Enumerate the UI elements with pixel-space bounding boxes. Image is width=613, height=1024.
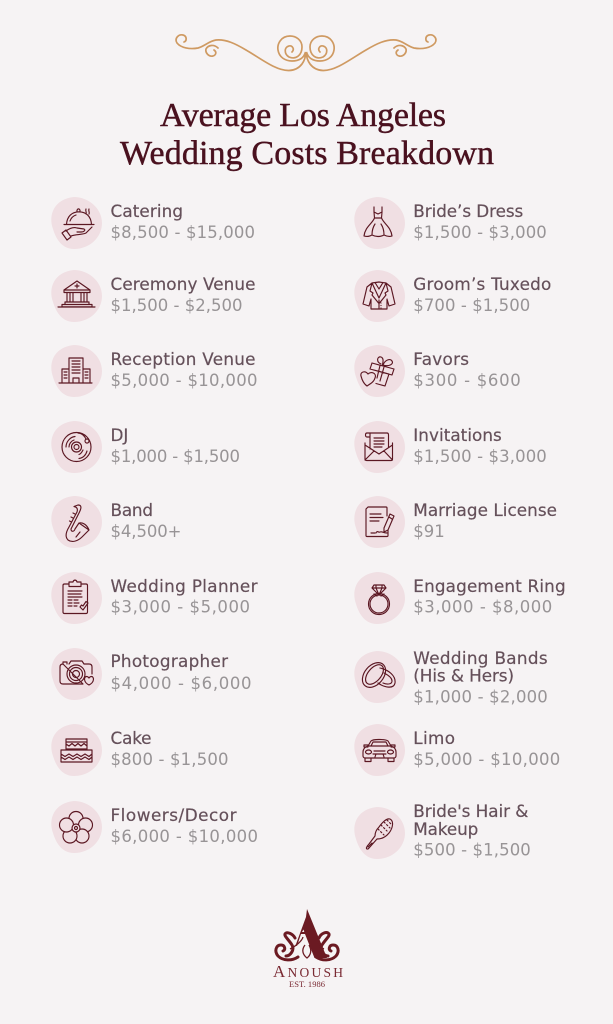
item: bride's hair and makeup: Makeup xyxy=(413,819,478,839)
item: band xyxy=(51,496,181,548)
item: wedding planner: $3,000 - $5,000 xyxy=(110,598,250,616)
item: groom's tuxedo xyxy=(354,270,551,322)
item: photographer: Photographer xyxy=(110,651,228,671)
item: bride's dress: $1,500 - $3,000 xyxy=(413,223,547,242)
item: favors xyxy=(354,345,521,397)
item: DJ: DJ xyxy=(110,425,128,445)
item: catering: $8,500 - $15,000 xyxy=(110,223,255,242)
item: flowers and decor xyxy=(51,801,258,853)
title: Wedding Costs Breakdown xyxy=(120,135,494,172)
logo: Anoush xyxy=(273,909,343,989)
item: wedding bands: (His & Hers) xyxy=(413,666,514,686)
item: limo xyxy=(354,724,560,776)
item: bride's hair and makeup: Bride's Hair & xyxy=(413,801,528,821)
item: favors: $300 - $600 xyxy=(413,371,521,390)
item: cake xyxy=(51,724,228,776)
item: DJ: $1,000 - $1,500 xyxy=(110,447,240,466)
title xyxy=(120,97,494,172)
item: flowers and decor: $6,000 - $10,000 xyxy=(110,827,258,846)
item: groom's tuxedo: $700 - $1,500 xyxy=(413,296,530,315)
title: Average Los Angeles xyxy=(160,97,446,134)
item: photographer: $4,000 - $6,000 xyxy=(110,674,252,693)
item: bride's dress: Bride’s Dress xyxy=(413,201,523,221)
item: limo: Limo xyxy=(413,728,455,748)
item: invitations: Invitations xyxy=(413,425,502,445)
item: catering: Catering xyxy=(110,201,183,221)
item: ceremony venue: Ceremony Venue xyxy=(110,274,256,294)
item: marriage license xyxy=(354,496,557,548)
item: limo: $5,000 - $10,000 xyxy=(413,750,560,769)
item: catering xyxy=(51,197,255,249)
item: band: Band xyxy=(110,500,153,520)
item: reception venue: Reception Venue xyxy=(110,349,256,369)
item: engagement ring xyxy=(354,572,566,624)
item: bride's hair and makeup: $500 - $1,500 xyxy=(413,840,531,860)
wordmark: ANOUSH xyxy=(273,962,343,981)
item: wedding planner: Wedding Planner xyxy=(110,576,258,596)
item: reception venue: $5,000 - $10,000 xyxy=(110,371,258,390)
item: invitations: $1,500 - $3,000 xyxy=(413,447,547,466)
item: band: $4,500+ xyxy=(110,522,182,541)
item: photographer xyxy=(51,648,251,700)
panel: right column of costs xyxy=(354,197,566,860)
item: cake: $800 - $1,500 xyxy=(110,750,228,769)
item: favors: Favors xyxy=(413,349,469,369)
panel: left column of costs xyxy=(51,197,258,853)
icon: monogram A with swirls xyxy=(276,909,338,960)
item: cake: Cake xyxy=(110,728,152,748)
item: wedding bands xyxy=(354,648,548,706)
item: flowers and decor: Flowers/Decor xyxy=(110,805,237,825)
item: ceremony venue: $1,500 - $2,500 xyxy=(110,296,242,315)
item: wedding bands: $1,000 - $2,000 xyxy=(413,688,548,706)
item: marriage license: $91 xyxy=(413,522,445,541)
established year: EST. 1986 xyxy=(289,979,325,989)
item: wedding planner xyxy=(51,572,258,624)
item: reception venue xyxy=(51,345,257,397)
item: wedding bands: Wedding Bands xyxy=(413,648,548,668)
item: DJ xyxy=(51,421,240,473)
item: engagement ring: Engagement Ring xyxy=(413,576,566,596)
item: bride's hair and makeup xyxy=(354,801,531,860)
item: bride's dress xyxy=(354,197,547,249)
item: ceremony venue xyxy=(51,270,255,322)
item: groom's tuxedo: Groom’s Tuxedo xyxy=(413,274,551,294)
item: marriage license: Marriage License xyxy=(413,500,557,520)
icon: decorative flourish xyxy=(176,35,436,71)
item: engagement ring: $3,000 - $8,000 xyxy=(413,598,552,616)
item: invitations xyxy=(354,421,547,473)
